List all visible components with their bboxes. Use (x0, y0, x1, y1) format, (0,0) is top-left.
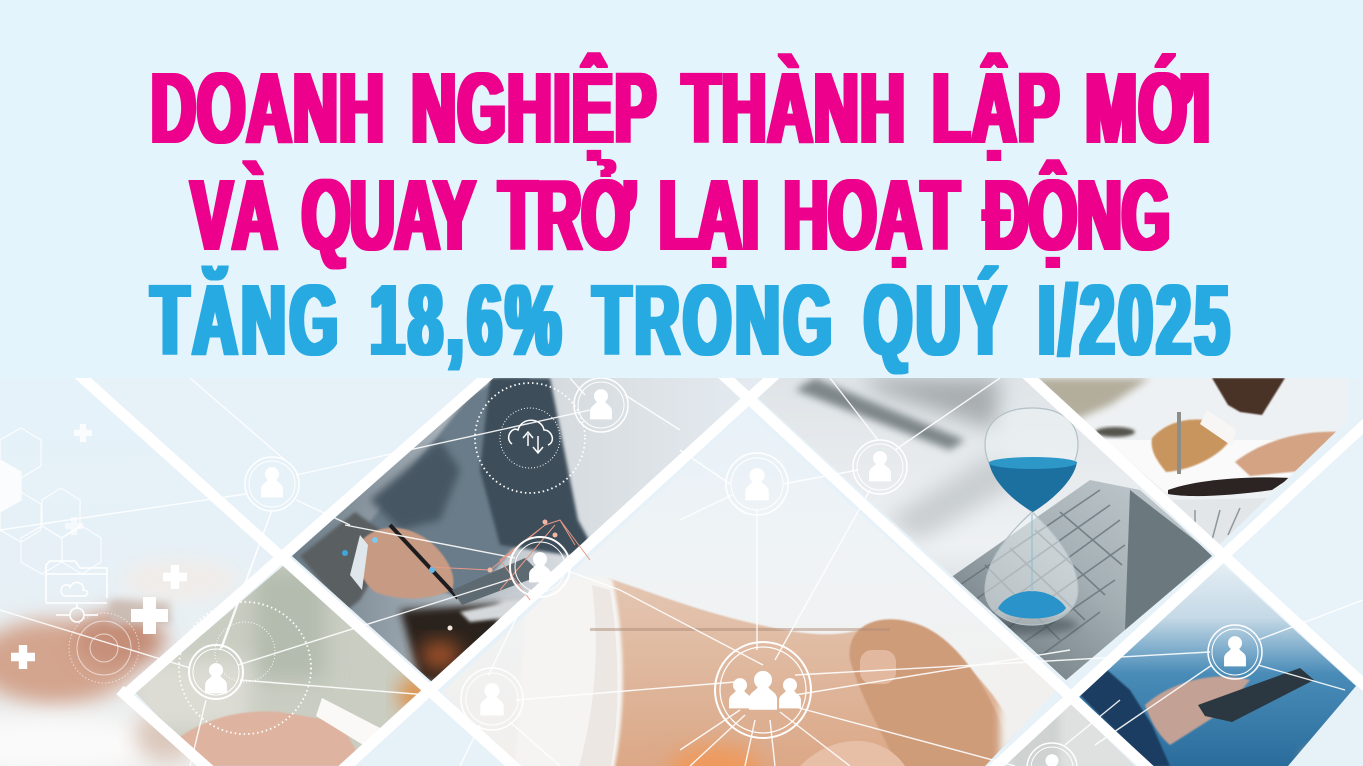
node: person 5 (461, 668, 523, 730)
panel: writing on paper (1038, 378, 1336, 544)
node: person 6 (726, 453, 788, 515)
photo collage (0, 372, 1363, 766)
network connection lines (0, 378, 1363, 766)
panel: hourglass on keyboard (755, 378, 1215, 684)
panel: tablet user (1079, 574, 1356, 766)
red data sparkle lines (430, 520, 590, 600)
icon: target rings (69, 613, 139, 683)
panel: handshake (442, 532, 1056, 766)
icon: cloud folder (46, 561, 107, 622)
white diagonal bands (76, 372, 1363, 766)
node: person 3 (510, 537, 570, 597)
icon: hourglass (985, 408, 1078, 625)
node: person 2 (574, 378, 628, 432)
title line 2: VÀ QUAY TRỞ LẠI HOẠT ĐỘNG (191, 159, 1170, 271)
panel: small bottom diamond (1004, 696, 1135, 766)
panel: left hand and icons (0, 559, 236, 766)
title (151, 52, 1229, 376)
node: person 1 (245, 457, 299, 511)
right pale area (1225, 425, 1363, 680)
icon: hexagon cluster (0, 428, 101, 574)
icon: dotted ring, lower left (179, 602, 311, 734)
title line 3: TĂNG 18,6% TRONG QUÝ I/2025 (151, 264, 1229, 376)
icon: plus signs (11, 424, 187, 669)
collage base (0, 378, 1363, 766)
node: person 7 (853, 440, 907, 494)
title line 1: DOANH NGHIỆP THÀNH LẬP MỚI (151, 52, 1210, 164)
panel: businessman with pen (290, 378, 780, 690)
panel: typing hands (130, 560, 431, 766)
node: person 8 (1208, 625, 1262, 679)
node: group of people (715, 642, 811, 738)
node: person 9 (1027, 743, 1077, 766)
keyboard keys (960, 490, 1125, 660)
glowing dots (342, 520, 558, 630)
icon: dotted ring, cloud sync (475, 383, 585, 493)
node: person 4 (189, 645, 243, 699)
